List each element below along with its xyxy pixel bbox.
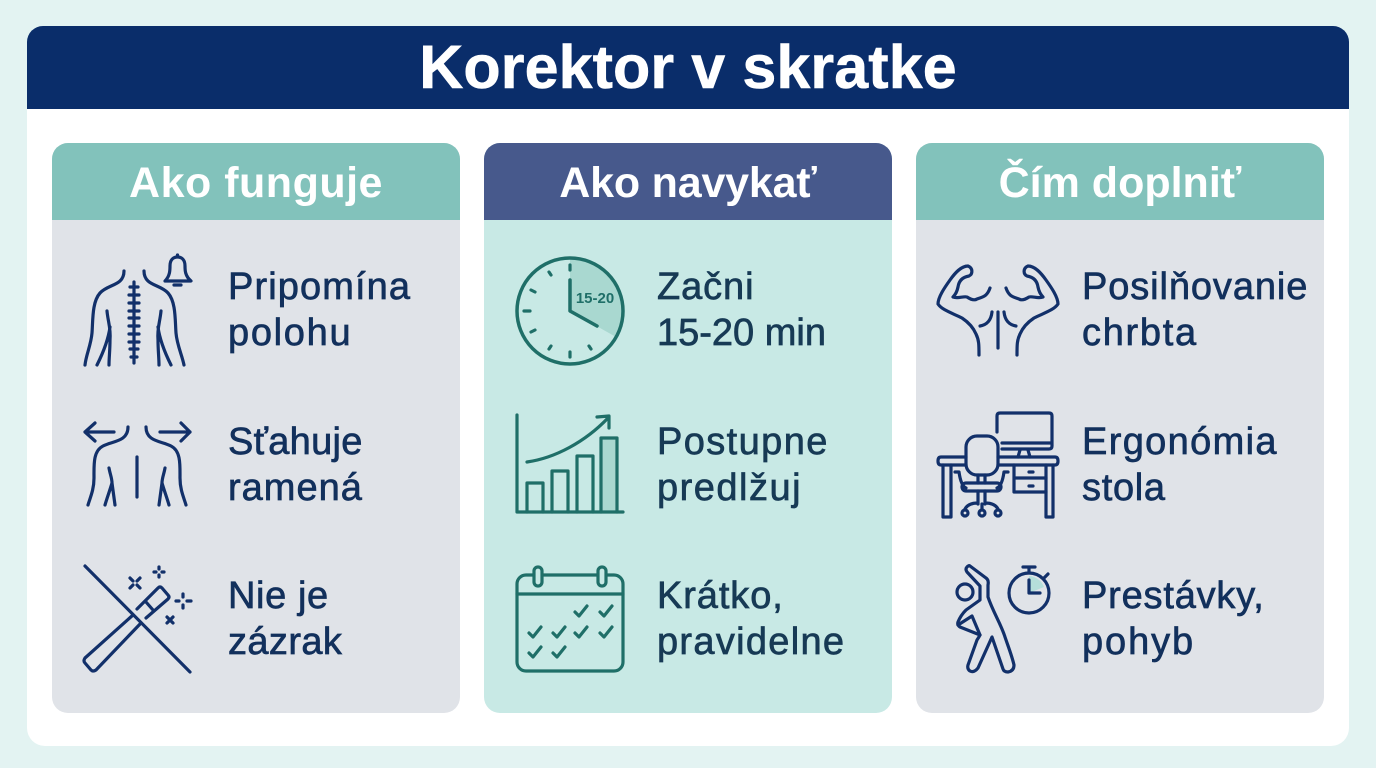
icon: muscular back	[936, 264, 1060, 357]
text: Krátko, pravidelne: pravidelne	[657, 621, 845, 663]
text: Nie je zázrak	[228, 575, 342, 663]
text: Začni 15-20 min: Začni	[657, 266, 754, 308]
text: Nie je zázrak: Nie je	[228, 575, 329, 617]
text: Sťahuje ramená	[228, 421, 363, 509]
text: Pripomína polohu: Pripomína	[228, 266, 411, 308]
icon: ergonomic desk	[936, 411, 1060, 519]
text: Prestávky, pohyb: pohyb	[1082, 621, 1195, 663]
text: Prestávky, pohyb: Prestávky,	[1082, 575, 1265, 617]
panel: Ako funguje	[52, 143, 460, 713]
heading: Čím doplniť	[916, 143, 1324, 220]
icon: back with spine and bell	[83, 253, 193, 367]
icon: growth bar chart	[515, 413, 625, 514]
text: Posilňovanie chrbta	[1082, 266, 1308, 354]
heading: Ako funguje	[52, 143, 460, 220]
panel: Ako navykať	[484, 143, 892, 713]
text: Sťahuje ramená: Sťahuje	[228, 421, 363, 463]
text: Začni 15-20 min: 15-20 min	[657, 312, 826, 354]
text: Ergonómia stola	[1082, 421, 1278, 509]
title	[27, 26, 1349, 109]
text: Ergonómia stola: stola	[1082, 467, 1166, 509]
heading: Čím doplniť: Čím doplniť	[999, 159, 1241, 207]
title: Korektor v skratke	[419, 33, 957, 101]
text: Posilňovanie chrbta: Posilňovanie	[1082, 266, 1308, 308]
heading: Ako navykať: Ako navykať	[559, 159, 817, 207]
icon: shoulders pulled apart	[83, 421, 192, 507]
text: Ergonómia stola: Ergonómia	[1082, 421, 1278, 463]
text: Krátko, pravidelne: Krátko,	[657, 575, 784, 617]
icon: crossed magic wand	[82, 564, 193, 674]
text: Krátko, pravidelne	[657, 575, 845, 663]
text: Prestávky, pohyb	[1082, 575, 1265, 663]
text: Pripomína polohu	[228, 266, 411, 354]
heading: Ako funguje: Ako funguje	[129, 159, 383, 207]
icon: clock 15-20	[515, 256, 625, 366]
text: Nie je zázrak: zázrak	[228, 621, 342, 663]
text: Sťahuje ramená: ramená	[228, 467, 363, 509]
text: Postupne predlžuj: predlžuj	[657, 467, 802, 509]
icon: calendar with checks	[515, 565, 625, 673]
text: Pripomína polohu: polohu	[228, 312, 352, 354]
text: Začni 15-20 min	[657, 266, 826, 354]
text: Postupne predlžuj: Postupne	[657, 421, 829, 463]
icon: clock 15-20: 15-20	[576, 290, 614, 307]
icon: stretching figure with stopwatch	[955, 564, 1051, 674]
heading: Ako navykať	[484, 143, 892, 220]
text: Postupne predlžuj	[657, 421, 829, 509]
panel: Čím doplniť	[916, 143, 1324, 713]
text: Posilňovanie chrbta: chrbta	[1082, 312, 1198, 354]
